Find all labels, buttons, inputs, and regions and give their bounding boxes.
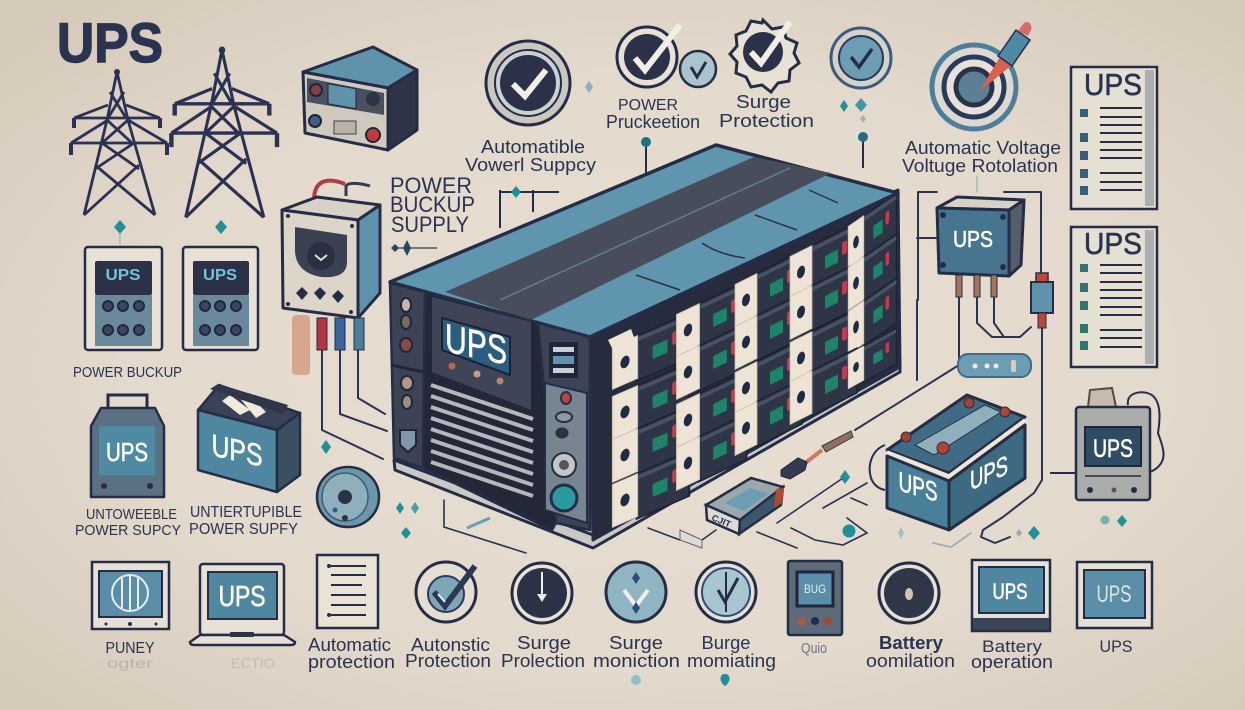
- icon: fuse lead: [781, 431, 853, 479]
- heading: power buckup supply: BUCKUP: [390, 192, 475, 217]
- icon: car battery: [198, 384, 300, 492]
- wires: junction box to main unit: [322, 318, 387, 459]
- icon: surge seal: [730, 20, 799, 92]
- marker: teal pins bottom: [631, 674, 730, 686]
- marker: diamonds under towers: [114, 220, 227, 245]
- label: surge prolection: Prolection: [501, 651, 585, 671]
- label: power pruckeetion: POWER: [618, 97, 678, 114]
- left front panel: [390, 283, 425, 468]
- icon: monitor 2: UPS: [992, 579, 1028, 604]
- diamonds lower middle: [321, 440, 1127, 540]
- buttons: [551, 392, 577, 511]
- tag: [680, 530, 702, 548]
- label: untiertupible power supfy: UNTIERTUPIBLE: [190, 504, 302, 521]
- label: puney: ogter: [107, 655, 153, 671]
- label: battery operation: Battery: [982, 637, 1043, 656]
- label: untoweeble power supcy: [75, 506, 181, 539]
- label: power pruckeetion: Pruckeetion: [606, 112, 700, 132]
- icon: handheld meter: [788, 561, 842, 635]
- icon: framed ups: UPS: [1096, 581, 1132, 608]
- vent louvres: [431, 385, 533, 496]
- label: surge protection top: Protection: [719, 111, 814, 131]
- label: automatible vowerl supply: Vowerl Suppcy: [465, 155, 596, 175]
- label: automatic protection: Automatic: [308, 635, 391, 655]
- icon: usb connector: [1031, 273, 1053, 328]
- icon: control unit right: UPS: [203, 267, 237, 284]
- icon: portable battery: [91, 395, 164, 497]
- document: ups list top: [1071, 67, 1157, 209]
- icon: small check badge: [831, 28, 891, 88]
- icon: monitor 2: [972, 560, 1050, 631]
- icon: monitor 1: [92, 562, 169, 629]
- label: burge momiating: momiating: [687, 651, 776, 671]
- icon: small power supply box: [303, 47, 417, 150]
- label: autonstic protection: Autonstic: [411, 635, 490, 655]
- icon: transmission tower left: [69, 69, 169, 215]
- label: untoweeble power supcy: UNTOWEEBLE: [86, 506, 177, 523]
- icon: big battery: UPS: [970, 450, 1008, 497]
- document: ups list bottom: [1071, 226, 1157, 367]
- label: untoweeble power supcy: POWER SUPCY: [75, 522, 181, 539]
- label: faded ectio: ECTIO: [231, 655, 275, 671]
- document: ups list bottom: UPS: [1084, 226, 1142, 261]
- label: burge momiating: [687, 633, 776, 671]
- label: power pruckeetion: [606, 97, 700, 132]
- label: surge moniction: moniction: [593, 651, 680, 671]
- unit base: [394, 362, 900, 548]
- mesh vent: [445, 157, 831, 320]
- label: surge protection top: Surge: [736, 92, 791, 112]
- icon: transmission tower right: [169, 46, 279, 217]
- label: automatible vowerl supply: [465, 137, 596, 175]
- label: burge momiating: Burge: [702, 633, 750, 653]
- icon: burge badge: [696, 562, 756, 622]
- icon: status pill: [958, 354, 1031, 377]
- icon: battery pack: CJIT: [710, 513, 733, 530]
- centre front panel: [423, 292, 556, 530]
- label: battery operation: operation: [971, 652, 1053, 672]
- icon: big battery: [870, 395, 1025, 530]
- label: automatic protection: protection: [308, 652, 395, 672]
- label: automatic voltage: [902, 138, 1061, 176]
- icon: framed ups: [1077, 562, 1152, 628]
- label: untiertupible power supfy: [189, 504, 302, 538]
- icon: document list: [317, 555, 378, 628]
- heading: power buckup supply: [390, 173, 475, 237]
- icon: control unit left: UPS: [106, 267, 141, 284]
- icon: big battery: UPS: [898, 466, 938, 508]
- label: surge prolection: Surge: [517, 633, 571, 653]
- icon: control unit right: [183, 247, 258, 350]
- icon: check dial: [416, 562, 476, 622]
- label: quio: Quio: [801, 640, 827, 657]
- battery module grid: [608, 193, 896, 530]
- icon: disc dial: [317, 467, 379, 527]
- ups display: [442, 318, 510, 375]
- label: battery oomilation: [866, 633, 955, 671]
- panel seams: [636, 190, 838, 290]
- document: ups list top: UPS: [1084, 67, 1142, 102]
- label: puney: PUNEY: [106, 640, 155, 657]
- icon: car battery: UPS: [212, 428, 262, 474]
- marker: diamonds top: [585, 81, 867, 123]
- side battery face: [590, 190, 900, 540]
- label: battery operation: [971, 637, 1053, 672]
- label: automatic voltage: Voltuge Rotolation: [902, 156, 1058, 176]
- small wiring under unit: [444, 478, 971, 553]
- label: battery oomilation: oomilation: [866, 651, 955, 671]
- label: surge moniction: Surge: [609, 633, 663, 653]
- status lights: [448, 362, 504, 384]
- label: automatic voltage: Automatic Voltage: [905, 138, 1061, 158]
- label: autonstic protection: [405, 635, 491, 671]
- icon: ups box: UPS: [953, 226, 993, 252]
- icon: plugged ups device: UPS: [1093, 435, 1133, 463]
- icon: check badge automatible: [486, 41, 570, 125]
- icon: laptop: [190, 564, 295, 645]
- icon: clock: [512, 563, 572, 623]
- label: surge protection top: [719, 92, 814, 131]
- main ups unit: [390, 145, 900, 548]
- label: surge moniction: [593, 633, 680, 671]
- icon: disc: [879, 563, 939, 623]
- icon: surge badge: [606, 562, 666, 622]
- wires: ups box and connector: [855, 176, 1042, 543]
- label: autonstic protection: Protection: [405, 651, 491, 671]
- left panel lights: [391, 298, 423, 452]
- icon: battery pack: [706, 478, 784, 534]
- icon: laptop: UPS: [218, 581, 266, 613]
- control panel: [545, 383, 587, 523]
- heading: power buckup supply: POWER: [390, 173, 472, 198]
- heading: power buckup supply: SUPPLY: [391, 212, 469, 237]
- icon: plugged ups device: [1050, 388, 1164, 500]
- label: puney: [106, 640, 155, 671]
- ups label on unit: UPS: [445, 315, 507, 374]
- icon: portable battery: UPS: [106, 437, 148, 467]
- label: power buckup: POWER BUCKUP: [73, 364, 182, 381]
- icon: junction box: [282, 181, 380, 375]
- icon: check badge power: [617, 25, 716, 87]
- label: automatic protection: [308, 635, 395, 672]
- label: automatible vowerl supply: Automatible: [481, 137, 585, 157]
- label: untiertupible power supfy: POWER SUPFY: [189, 521, 298, 538]
- pin connectors above unit: [641, 132, 868, 173]
- icon: ups box: [937, 197, 1024, 297]
- label: surge prolection: [501, 633, 585, 671]
- title: UPS: [57, 11, 163, 74]
- connector marks near heading: [391, 186, 559, 256]
- label: ups: UPS: [1100, 637, 1132, 656]
- right front panel: [538, 323, 590, 530]
- icon: control unit left: [85, 247, 162, 350]
- small display: [549, 342, 578, 378]
- label: battery oomilation: Battery: [879, 633, 943, 653]
- icon: handheld meter: BUG: [804, 582, 826, 596]
- icon: target with dart: [932, 22, 1031, 129]
- top panel: [390, 145, 898, 337]
